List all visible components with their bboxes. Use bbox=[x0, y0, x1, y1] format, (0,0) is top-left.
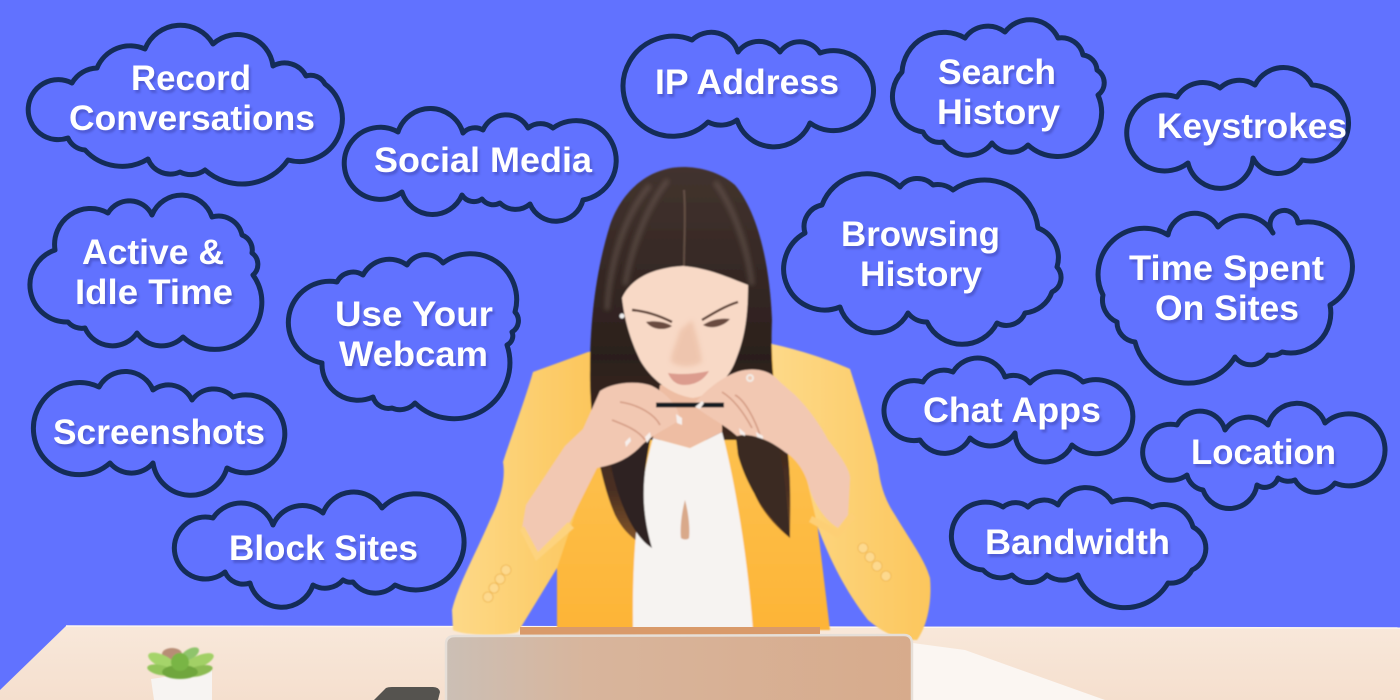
label: Chat Apps bbox=[923, 391, 1101, 430]
cloud outline bbox=[1098, 210, 1352, 383]
label: Social Media bbox=[374, 141, 593, 180]
succulent bbox=[146, 645, 216, 679]
right sleeve buttons bbox=[858, 543, 891, 581]
cloud outline bbox=[884, 358, 1133, 462]
cloud outline bbox=[33, 371, 285, 495]
label: Keystrokes bbox=[1157, 107, 1347, 146]
cloud: Location bbox=[1143, 403, 1385, 509]
neck bbox=[653, 385, 722, 448]
desk bbox=[0, 626, 1400, 700]
label: Location bbox=[1191, 433, 1336, 472]
cloud: Keystrokes bbox=[1127, 68, 1349, 188]
earring bbox=[620, 314, 624, 318]
blouse bbox=[633, 432, 753, 630]
blouse keyhole bbox=[681, 500, 689, 540]
lips bbox=[668, 371, 709, 385]
label: Screenshots bbox=[53, 413, 265, 452]
left eye bbox=[646, 321, 672, 329]
label: Conversations bbox=[69, 99, 315, 138]
label: History bbox=[937, 93, 1061, 132]
laptop lid bbox=[446, 635, 912, 700]
cloud: Block Sites bbox=[174, 492, 464, 607]
cloud: Chat Apps bbox=[884, 358, 1133, 462]
left eyebrow bbox=[632, 310, 672, 322]
label: Bandwidth bbox=[985, 523, 1170, 562]
right cuff bbox=[809, 512, 856, 538]
desk reflection strip bbox=[520, 627, 820, 635]
plant bbox=[146, 645, 216, 700]
jacket body bbox=[540, 344, 830, 630]
cloud outline bbox=[1127, 68, 1349, 188]
pen bbox=[656, 402, 724, 408]
hair bbox=[590, 167, 790, 548]
smartphone bbox=[374, 687, 440, 700]
laptop bbox=[446, 627, 912, 700]
hair highlights bbox=[607, 180, 752, 310]
label: On Sites bbox=[1155, 289, 1299, 328]
woman at the desk bbox=[452, 167, 930, 640]
cloud: Screenshots bbox=[33, 371, 285, 495]
cloud outline bbox=[784, 174, 1061, 344]
cloud outline bbox=[344, 108, 616, 221]
left forearm and hand bbox=[522, 383, 680, 556]
cloud outline bbox=[951, 488, 1206, 608]
left sleeve bbox=[452, 352, 592, 635]
left sleeve buttons bbox=[483, 565, 511, 602]
cloud outline bbox=[30, 195, 262, 349]
hair parting bbox=[683, 190, 686, 268]
cloud: Social Media bbox=[344, 108, 616, 221]
left front hair strand bbox=[610, 440, 652, 548]
label: Active & bbox=[82, 233, 224, 272]
cloud: Browsing History bbox=[784, 174, 1061, 344]
label: Use Your bbox=[335, 295, 493, 334]
cloud: Active & Idle Time bbox=[30, 195, 262, 349]
label: Block Sites bbox=[229, 529, 418, 568]
label: Webcam bbox=[339, 335, 488, 374]
label: IP Address bbox=[655, 63, 839, 102]
cloud outline bbox=[623, 32, 874, 147]
left cuff bbox=[520, 522, 574, 561]
right forearm and hand bbox=[693, 370, 850, 528]
cloud: Bandwidth bbox=[951, 488, 1206, 608]
right sleeve bbox=[772, 344, 930, 640]
cloud outline bbox=[288, 254, 518, 419]
face bbox=[622, 266, 748, 398]
label: History bbox=[860, 255, 983, 294]
label: Record bbox=[131, 59, 251, 98]
fingernails bbox=[625, 401, 763, 447]
cloud: Time Spent On Sites bbox=[1098, 210, 1352, 383]
label: Search bbox=[938, 53, 1056, 92]
label: Idle Time bbox=[75, 273, 233, 312]
cloud: Record Conversations bbox=[28, 25, 342, 184]
label: Time Spent bbox=[1129, 249, 1324, 288]
cloud: IP Address bbox=[623, 32, 874, 147]
cloud outline bbox=[892, 20, 1104, 156]
cloud: Search History bbox=[892, 20, 1104, 156]
right eyebrow bbox=[702, 302, 738, 320]
label: Browsing bbox=[841, 215, 1000, 254]
cloud outline bbox=[1143, 403, 1385, 509]
nose shadow bbox=[671, 320, 702, 366]
cloud outline bbox=[28, 25, 342, 184]
right eye bbox=[703, 319, 730, 327]
ring bbox=[747, 375, 753, 381]
finger shadows bbox=[612, 392, 760, 440]
right front hair strand bbox=[735, 430, 790, 538]
cloud outline bbox=[174, 492, 464, 607]
pot bbox=[151, 670, 212, 700]
cloud: Use Your Webcam bbox=[288, 254, 518, 419]
